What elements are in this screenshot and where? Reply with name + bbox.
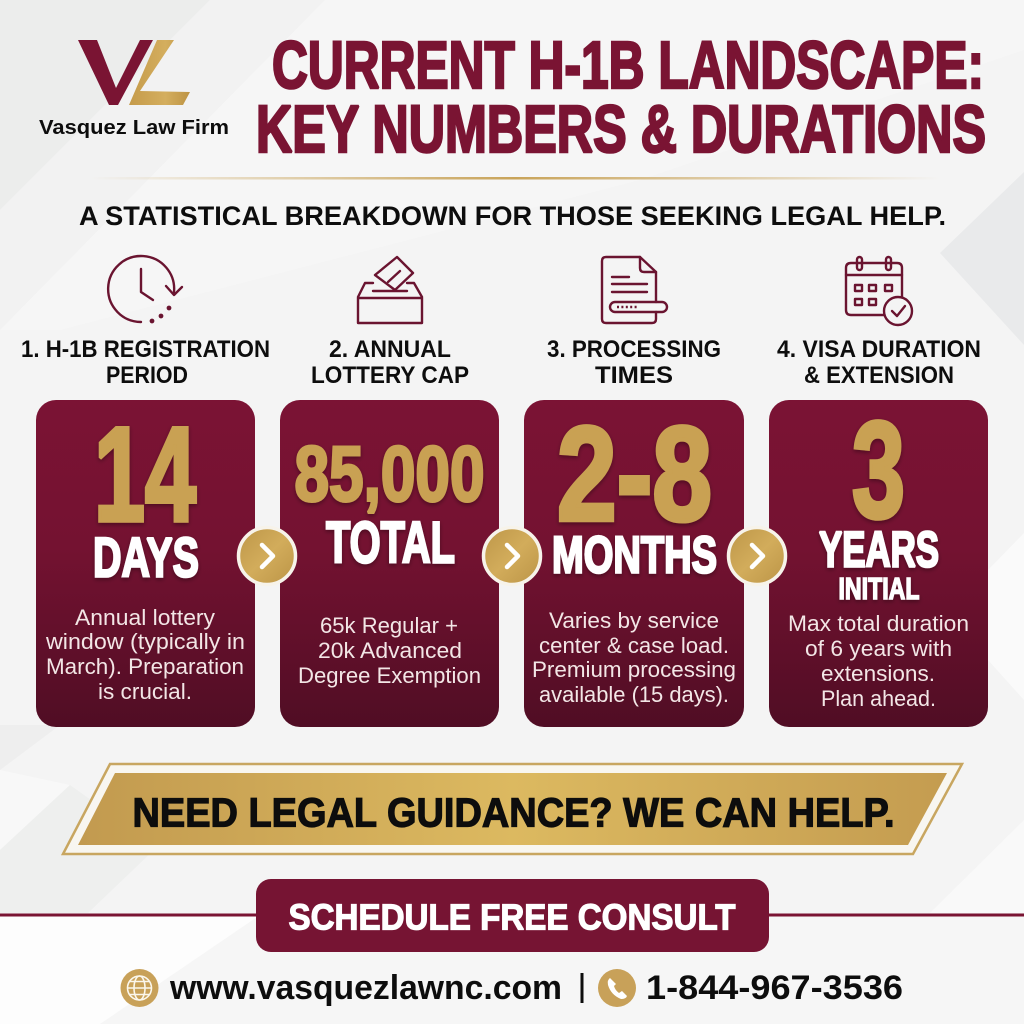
panel: 85,000 total: Degree Exemption: [298, 663, 481, 688]
icon: globe: [120, 969, 158, 1007]
button: schedule free consult: SCHEDULE FREE CONSULT: [288, 896, 736, 938]
panel: 14 days: is crucial.: [98, 679, 192, 704]
label: lottery cap: [311, 336, 469, 389]
panel: 2-8 months: center & case load.: [539, 633, 729, 658]
panel: 85,000 total: 20k Advanced: [318, 638, 462, 663]
panel: 2-8 months: Varies by service: [549, 608, 719, 633]
label: registration period: 1. H-1B REGISTRATION: [21, 336, 270, 363]
panel: 3 years initial: extensions.: [821, 661, 935, 686]
panel: 3 years initial: INITIAL: [838, 571, 920, 606]
panel: 14 days: 14: [94, 400, 196, 550]
panel: 2-8 months: available (15 days).: [539, 682, 729, 707]
title: [256, 28, 986, 167]
panel: 2-8 months: 2-8: [557, 400, 712, 549]
panel: 14 days: window (typically in: [45, 629, 245, 654]
panel: 85,000 total: 65k Regular +: [320, 613, 458, 638]
panel: 3 years initial: of 6 years with: [805, 636, 952, 661]
panel: 2-8 months: MONTHS: [552, 526, 717, 584]
panel: 3 years initial: Plan ahead.: [821, 686, 936, 711]
icon: calendar: [846, 257, 912, 325]
label: processing times: TIMES: [595, 362, 673, 389]
label: registration period: [21, 336, 270, 389]
label: lottery cap: LOTTERY CAP: [311, 362, 469, 389]
icon: document: [602, 257, 667, 323]
label: visa duration: [777, 336, 981, 389]
separator: [580, 973, 584, 1003]
panel: 14 days: Annual lottery: [75, 605, 215, 630]
panel: 14 days: DAYS: [93, 526, 199, 588]
logo: Vasquez Law Firm: Vasquez Law Firm: [39, 117, 229, 139]
icon: phone: [598, 969, 636, 1007]
website: www.vasquezlawnc.com: [169, 969, 562, 1007]
label: lottery cap: 2. ANNUAL: [329, 336, 451, 363]
icon: ballot box: [358, 257, 422, 323]
banner: need legal guidance: [63, 764, 962, 854]
button: schedule free consult: [256, 879, 769, 952]
panel: 3 years initial: Max total duration: [788, 611, 969, 636]
panel: 2-8 months: [524, 400, 744, 727]
logo: Vasquez Law Firm: [39, 40, 229, 139]
panel: 85,000 total: [280, 400, 499, 727]
banner: need legal guidance: NEED LEGAL GUIDANCE? WE CAN HELP.: [132, 790, 894, 836]
panel: 3 years initial: 3: [852, 394, 905, 547]
subtitle: A STATISTICAL BREAKDOWN FOR THOSE SEEKING LEGAL HELP.: [79, 201, 946, 231]
panel: 14 days: March). Preparation: [46, 654, 244, 679]
panel: 14 days: [36, 400, 255, 727]
label: registration period: PERIOD: [106, 362, 188, 389]
panel: 2-8 months: Premium processing: [532, 657, 736, 682]
arrow: step 2 to 3: [484, 528, 540, 584]
panel: 3 years initial: [769, 394, 988, 727]
icon: clock: [108, 256, 182, 322]
label: processing times: [547, 336, 721, 389]
phone number: 1-844-967-3536: [646, 969, 903, 1007]
arrow: step 1 to 2: [238, 528, 296, 584]
arrow: step 3 to 4: [728, 528, 786, 584]
label: visa duration: 4. VISA DURATION: [777, 336, 981, 363]
panel: 85,000 total: TOTAL: [326, 510, 455, 576]
label: visa duration: & EXTENSION: [804, 362, 954, 389]
panel: 3 years initial: YEARS: [819, 522, 939, 578]
label: processing times: 3. PROCESSING: [547, 336, 721, 363]
panel: 85,000 total: 85,000: [294, 430, 484, 518]
